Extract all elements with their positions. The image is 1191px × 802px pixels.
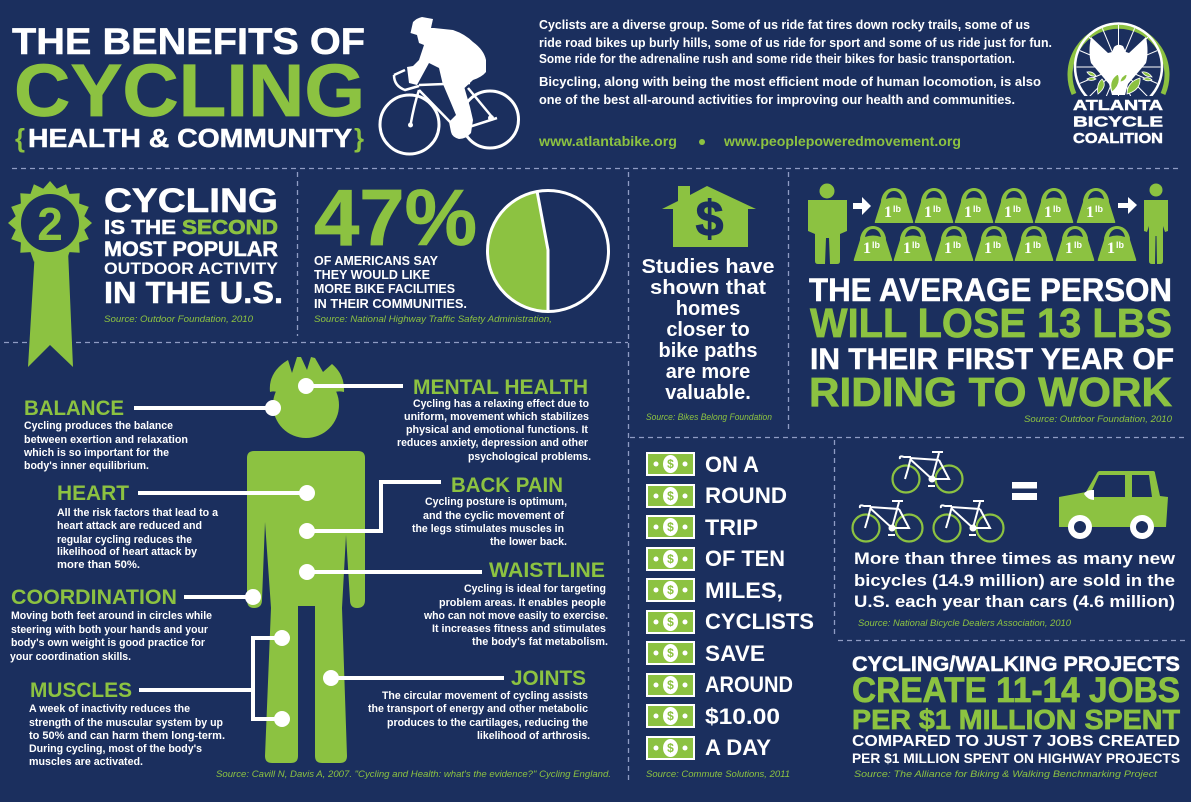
callout: mental health: physical and emotional functions. It bbox=[406, 424, 588, 436]
callout: back pain: and the cyclic movement of bbox=[423, 510, 564, 522]
logo: Atlanta Bicycle Coalition: BICYCLE bbox=[1073, 114, 1163, 130]
panel: jobs bbox=[852, 653, 1180, 780]
stat: 47%: 47% bbox=[314, 173, 477, 262]
weights: bottom row: lb bbox=[993, 240, 1002, 250]
source: Source: Bikes Belong Foundation bbox=[646, 412, 772, 423]
callout: muscles: to 50% and can harm them long-term. bbox=[29, 730, 225, 742]
icon: arrow bbox=[1118, 197, 1137, 214]
callout: coordination: body's own weight is good practice for bbox=[11, 637, 206, 649]
icon: slim person bbox=[1144, 184, 1168, 264]
source: Source: Outdoor Foundation, 2010 bbox=[1024, 414, 1173, 425]
text: studies: are more bbox=[666, 361, 750, 383]
weights: top row: lb bbox=[1013, 204, 1022, 214]
weights: top row: lb bbox=[1095, 204, 1104, 214]
icon: car bbox=[1059, 471, 1168, 539]
source: Source: Commute Solutions, 2011 bbox=[646, 769, 790, 780]
icons: dollar bills: $ bbox=[667, 741, 674, 755]
callout: heart: HEART bbox=[57, 482, 129, 505]
callout: heart: regular cycling reduces the bbox=[57, 534, 192, 546]
callout: waistline bbox=[423, 559, 608, 648]
text: savings: ROUND bbox=[705, 483, 787, 508]
callout: muscles: MUSCLES bbox=[30, 679, 132, 702]
weights: bottom row: lb bbox=[1033, 240, 1042, 250]
callout: coordination bbox=[10, 586, 212, 663]
website links: www.atlantabike.org bbox=[538, 134, 677, 149]
callout: waistline: the body's fat metabolism. bbox=[472, 636, 608, 648]
title: HEALTH & COMMUNITY bbox=[28, 123, 352, 153]
text: americans: MORE BIKE FACILITIES bbox=[314, 281, 455, 296]
intro text: one of the best all-around activities for improving our health and communities. bbox=[539, 92, 1015, 107]
text: three times as many: bicycles (14.9 million) are sold in the bbox=[854, 571, 1175, 590]
text: three times as many: U.S. each year than cars (4.6 million) bbox=[854, 592, 1175, 611]
weights: bottom row: 1 bbox=[1107, 240, 1115, 257]
logo: Atlanta Bicycle Coalition bbox=[1065, 20, 1171, 147]
weights: bottom row: 1 bbox=[903, 240, 911, 257]
intro text: Bicycling, along with being the most efficient mode of human locomotion, is also bbox=[539, 74, 1041, 89]
text: savings: A DAY bbox=[705, 735, 771, 760]
callout: coordination: steering with both your hands and your bbox=[11, 624, 209, 636]
callout: balance: body's inner equilibrium. bbox=[24, 460, 149, 472]
source: Source: The Alliance for Biking & Walking Benchmarking Project bbox=[854, 769, 1157, 780]
weights: bottom row: lb bbox=[912, 240, 921, 250]
panel: homes near bike paths bbox=[642, 186, 774, 423]
weights: top row bbox=[875, 188, 1115, 223]
callout: balance: between exertion and relaxation bbox=[24, 434, 188, 446]
weights: top row: 1 bbox=[1086, 204, 1094, 221]
weights: top row: 1 bbox=[1004, 204, 1012, 221]
heading: cycling is the second: MOST POPULAR bbox=[104, 238, 278, 261]
intro text: ride road bikes up burly hills, some of us ride for sport and some of us ride just for fun. bbox=[539, 35, 1052, 50]
pie chart bbox=[487, 190, 608, 312]
callout: waistline: problem areas. It enables people bbox=[439, 597, 606, 609]
callout: heart: heart attack are reduced and bbox=[57, 520, 202, 532]
callout: balance bbox=[23, 397, 188, 472]
text: studies: valuable. bbox=[665, 382, 751, 404]
callout: balance: which is so important for the bbox=[23, 447, 169, 459]
heading: jobs created: PER $1 MILLION SPENT ON HIGHWAY PROJECTS bbox=[852, 750, 1180, 766]
panel: round trip savings bbox=[646, 452, 814, 780]
body diagram bbox=[10, 357, 611, 780]
panel: bikes versus cars bbox=[852, 452, 1176, 629]
text: studies: closer to bbox=[666, 319, 750, 341]
callout: joints: the transport of energy and other metabolic bbox=[368, 703, 588, 715]
weights: top row: lb bbox=[933, 204, 942, 214]
icon: arrow bbox=[853, 197, 871, 215]
weights: top row: 1 bbox=[924, 204, 932, 221]
weights: top row: lb bbox=[893, 204, 902, 214]
text: studies bbox=[642, 256, 774, 404]
heading: cycling is the second: IN THE U.S. bbox=[104, 275, 283, 310]
icons: dollar bills: $ bbox=[667, 583, 674, 597]
callout: heart: All the risk factors that lead to a bbox=[57, 507, 219, 519]
figure: helmeted person bbox=[247, 357, 365, 763]
heading: jobs created: CYCLING/WALKING PROJECTS bbox=[852, 653, 1180, 676]
text: savings: OF TEN bbox=[705, 546, 785, 571]
callout: muscles: strength of the muscular system by up bbox=[29, 717, 223, 729]
intro text bbox=[539, 17, 1052, 107]
heading: cycling is the second bbox=[104, 182, 283, 310]
text: savings: CYCLISTS bbox=[705, 609, 814, 634]
callout: heart bbox=[57, 482, 219, 571]
text: americans: THEY WOULD LIKE bbox=[314, 267, 430, 282]
callout: joints: JOINTS bbox=[511, 667, 586, 690]
callout: mental health: psychological problems. bbox=[468, 451, 591, 463]
connector lines bbox=[134, 386, 504, 719]
heading: average person bbox=[809, 272, 1174, 415]
callout: waistline: It increases fitness and stimulates bbox=[432, 623, 606, 635]
heading: average person: RIDING TO WORK bbox=[809, 369, 1172, 415]
callout: coordination: COORDINATION bbox=[11, 586, 177, 609]
icon: ribbon rosette: 2 bbox=[37, 198, 63, 250]
weights: bottom row: 1 bbox=[1024, 240, 1032, 257]
callout: back pain: the lower back. bbox=[490, 536, 567, 548]
icons: dollar bills: $ bbox=[667, 678, 674, 692]
weights: top row: 1 bbox=[1044, 204, 1052, 221]
logo: Atlanta Bicycle Coalition: ATLANTA bbox=[1073, 97, 1163, 114]
icon: cyclist bbox=[380, 17, 518, 154]
title: CYCLING bbox=[14, 49, 365, 132]
icons: dollar bills: $ bbox=[667, 615, 674, 629]
callout: balance: Cycling produces the balance bbox=[24, 420, 173, 432]
intro text: Cyclists are a diverse group. Some of us ride fat tires down rocky trails, some of us bbox=[539, 17, 1030, 32]
icon: house with dollar bbox=[662, 186, 756, 247]
text: studies: shown that bbox=[650, 277, 766, 299]
weights: bottom row: lb bbox=[1074, 240, 1083, 250]
body points bbox=[245, 378, 339, 727]
heading: cycling is the second: SECOND bbox=[182, 217, 278, 239]
callout: coordination: Moving both feet around in circles while bbox=[11, 610, 212, 622]
weights: bottom row: 1 bbox=[984, 240, 992, 257]
heading: jobs created: COMPARED TO JUST 7 JOBS CREATED bbox=[852, 733, 1180, 750]
callout: back pain: BACK PAIN bbox=[451, 474, 563, 497]
icons: dollar bills: $ bbox=[667, 520, 674, 534]
text: studies: homes bbox=[676, 298, 740, 320]
callout: mental health: Cycling has a relaxing effect due to bbox=[413, 398, 589, 410]
weights: top row: lb bbox=[1053, 204, 1062, 214]
callout: waistline: who can not move easily to exercise. bbox=[423, 610, 608, 622]
callout: muscles: During cycling, most of the body's bbox=[29, 743, 202, 755]
icons: dollar bills: $ bbox=[667, 552, 674, 566]
text: studies: Studies have bbox=[642, 256, 774, 278]
icon: large person bbox=[808, 184, 847, 264]
callout: joints bbox=[368, 667, 590, 742]
logo: Atlanta Bicycle Coalition: COALITION bbox=[1073, 130, 1163, 147]
callout: joints: The circular movement of cycling assists bbox=[382, 690, 588, 702]
text: savings: $10.00 bbox=[705, 704, 780, 729]
callout: joints: likelihood of arthrosis. bbox=[477, 730, 590, 742]
callout: coordination: your coordination skills. bbox=[10, 651, 131, 663]
text: three times as many: More than three times as many new bbox=[854, 549, 1176, 568]
title bbox=[12, 21, 365, 153]
callout: heart: likelihood of heart attack by bbox=[57, 546, 198, 558]
title: } bbox=[354, 123, 364, 153]
text: americans: OF AMERICANS SAY bbox=[314, 253, 438, 268]
callout: back pain: the legs stimulates muscles in bbox=[412, 523, 564, 535]
source: Source: Outdoor Foundation, 2010 bbox=[104, 314, 254, 325]
weights: bottom row bbox=[854, 226, 1136, 261]
heading: jobs created bbox=[852, 653, 1180, 766]
callout: muscles bbox=[29, 679, 225, 768]
callout: back pain bbox=[412, 474, 567, 548]
icon: house with dollar: $ bbox=[696, 191, 724, 247]
panel: 47 percent bbox=[314, 173, 608, 325]
heading: average person: IN THEIR FIRST YEAR OF bbox=[810, 343, 1174, 376]
text: americans bbox=[314, 253, 467, 311]
text: savings: SAVE bbox=[705, 641, 765, 666]
text: savings: MILES, bbox=[705, 578, 783, 603]
heading: cycling is the second: CYCLING bbox=[104, 182, 278, 220]
icons: dollar bills: $ bbox=[667, 457, 674, 471]
icons: dollar bills: $ bbox=[667, 646, 674, 660]
weights: bottom row: lb bbox=[1116, 240, 1125, 250]
text: americans: IN THEIR COMMUNITIES. bbox=[314, 296, 467, 311]
icons: dollar bills: $ bbox=[667, 709, 674, 723]
callout: back pain: Cycling posture is optimum, bbox=[425, 496, 567, 508]
callout: waistline: Cycling is ideal for targeting bbox=[464, 583, 606, 595]
callout: joints: produces to the cartilages, reducing the bbox=[387, 717, 588, 729]
website links: www.peoplepoweredmovement.org bbox=[723, 134, 961, 149]
website links bbox=[538, 134, 961, 149]
weights: bottom row: 1 bbox=[1065, 240, 1073, 257]
panel: second most popular bbox=[8, 181, 283, 367]
heading: average person: WILL LOSE 13 LBS bbox=[810, 300, 1172, 346]
callout: mental health: reduces anxiety, depression and other bbox=[397, 437, 589, 449]
heading: jobs created: PER $1 MILLION SPENT bbox=[852, 704, 1180, 735]
weights: bottom row: lb bbox=[872, 240, 881, 250]
intro text: Some ride for the adrenaline rush and some ride their bikes for basic transportation. bbox=[539, 51, 1015, 66]
callout: heart: more than 50%. bbox=[57, 559, 140, 571]
icons: three bicycles bbox=[852, 452, 1004, 542]
callout: mental health bbox=[397, 376, 591, 463]
source: Source: National Highway Traffic Safety Administration, bbox=[314, 314, 552, 325]
callout: balance: BALANCE bbox=[24, 397, 124, 420]
callout: muscles: muscles are activated. bbox=[29, 756, 143, 768]
title: THE BENEFITS OF bbox=[12, 21, 365, 62]
source: Source: Cavill N, Davis A, 2007. "Cycling and Health: what's the evidence?" Cycling England. bbox=[216, 769, 611, 780]
source: Source: National Bicycle Dealers Association, 2010 bbox=[858, 618, 1072, 629]
text: three times as many bbox=[854, 549, 1176, 611]
icon: ribbon rosette bbox=[8, 181, 92, 367]
weights: bottom row: 1 bbox=[944, 240, 952, 257]
heading: jobs created: CREATE 11-14 JOBS bbox=[852, 671, 1180, 710]
callout: waistline: WAISTLINE bbox=[489, 559, 605, 582]
icons: dollar bills bbox=[646, 452, 695, 760]
text: studies: bike paths bbox=[659, 340, 757, 362]
text: savings: AROUND bbox=[705, 672, 793, 697]
callout: mental health: uniform, movement which stabilizes bbox=[404, 411, 589, 423]
heading: cycling is the second: OUTDOOR ACTIVITY bbox=[104, 259, 279, 278]
weights: bottom row: 1 bbox=[863, 240, 871, 257]
weights: top row: 1 bbox=[964, 204, 972, 221]
heading: cycling is the second: IS THE bbox=[104, 217, 176, 239]
weights: top row: 1 bbox=[884, 204, 892, 221]
title: { bbox=[15, 123, 25, 153]
heading: average person: THE AVERAGE PERSON bbox=[809, 272, 1172, 308]
panel: weight loss bbox=[808, 184, 1174, 425]
text: savings: ON A bbox=[705, 452, 759, 477]
text: savings bbox=[705, 452, 814, 760]
weights: top row: lb bbox=[973, 204, 982, 214]
callout: mental health: MENTAL HEALTH bbox=[413, 376, 588, 399]
icons: dollar bills: $ bbox=[667, 489, 674, 503]
weights: bottom row: lb bbox=[953, 240, 962, 250]
callout: muscles: A week of inactivity reduces the bbox=[29, 703, 190, 715]
text: savings: TRIP bbox=[705, 515, 758, 540]
icon: equals bbox=[1012, 482, 1037, 500]
